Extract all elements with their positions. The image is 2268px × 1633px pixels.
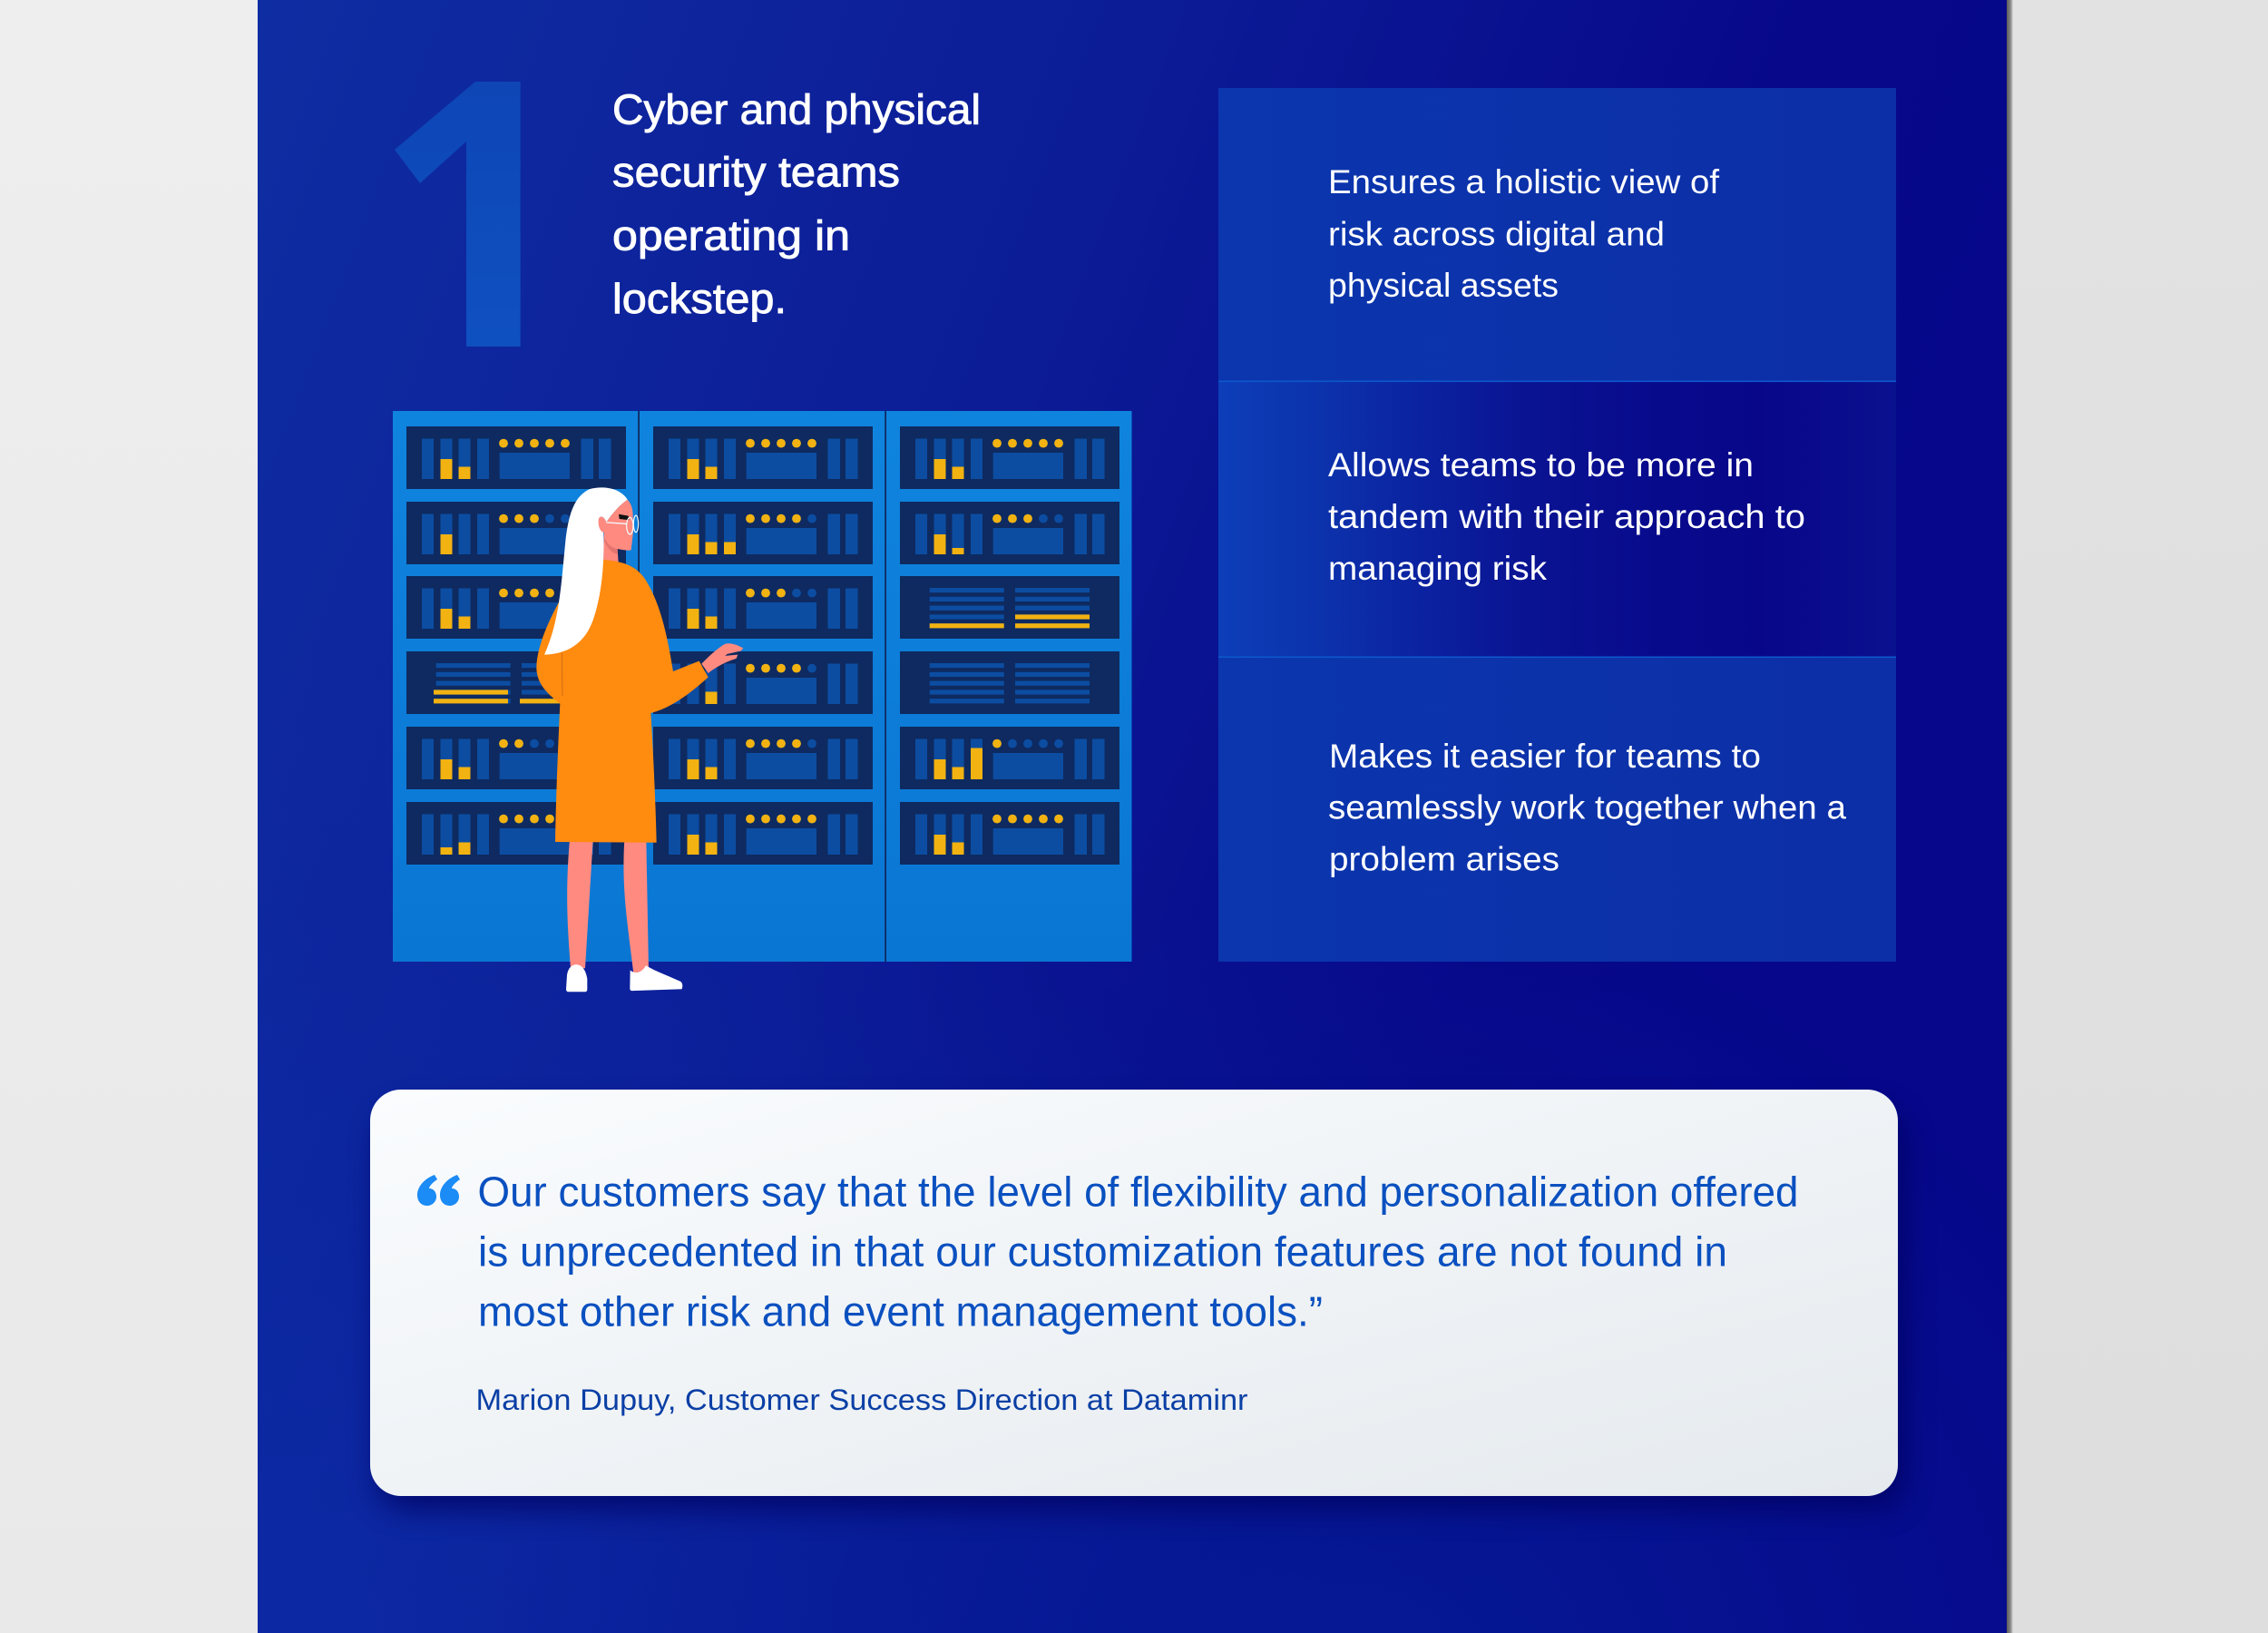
- quote card shadow: [377, 1109, 1905, 1510]
- quote text: Our customers say that the level of flexibility and personalization offered: [477, 1169, 1798, 1216]
- panel: benefit 1: Ensures a holistic view of: [1328, 163, 1720, 200]
- dress crease: [561, 652, 563, 696]
- eyebrow: [619, 514, 629, 520]
- hair: [544, 487, 628, 655]
- quote text: [477, 1169, 1798, 1335]
- panel: benefit 2: [1218, 381, 1896, 657]
- heading: Cyber and physical: [612, 85, 981, 132]
- orange dress: [536, 560, 709, 843]
- rack frame: [393, 411, 1132, 962]
- panel: benefit 3: [1218, 657, 1896, 962]
- rack 1 units: [406, 426, 626, 865]
- rack 2 units: [653, 426, 873, 865]
- quote text: is unprecedented in that our customization features are not found in: [478, 1228, 1727, 1276]
- panel: benefit 1: risk across digital and: [1328, 216, 1665, 252]
- panel: benefit 2: Allows teams to be more in: [1328, 446, 1754, 484]
- background: right wall: [2007, 0, 2268, 1633]
- head and neck: [598, 500, 633, 562]
- heading: [612, 85, 981, 322]
- panel: benefit 3: problem arises: [1329, 840, 1559, 878]
- blue poster page: [258, 0, 2007, 1633]
- panel: benefit 1: [1218, 88, 1896, 381]
- attribution: Marion Dupuy, Customer Success Direction at Dataminr: [475, 1384, 1248, 1416]
- icon: opening quote mark: [417, 1175, 460, 1206]
- heading: lockstep.: [612, 275, 787, 322]
- panel: benefit 2: managing risk: [1328, 550, 1548, 587]
- page edge shadow: [2007, 0, 2013, 1633]
- big number 1: [395, 82, 521, 347]
- panel: benefit 1: physical assets: [1328, 267, 1559, 304]
- heading: operating in: [612, 212, 850, 259]
- rack 3 units: [900, 426, 1119, 865]
- neck shadow: [604, 538, 618, 554]
- panel: benefit 2: tandem with their approach to: [1328, 498, 1805, 535]
- hand: [701, 643, 743, 673]
- glasses: [606, 515, 639, 534]
- heading: security teams: [612, 149, 900, 196]
- legs: [567, 840, 649, 973]
- panel: benefit 3: Makes it easier for teams to: [1329, 738, 1761, 775]
- woman with white hair and orange dress: [536, 487, 743, 992]
- shoes: [566, 964, 682, 992]
- quote text: most other risk and event management tools.”: [478, 1288, 1323, 1335]
- panel: benefit 3: seamlessly work together when a: [1328, 789, 1846, 826]
- server racks illustration: [393, 411, 1132, 962]
- panel divider lines: [1218, 381, 1896, 658]
- background: left wall: [0, 0, 258, 1633]
- quote card: [370, 1090, 1898, 1496]
